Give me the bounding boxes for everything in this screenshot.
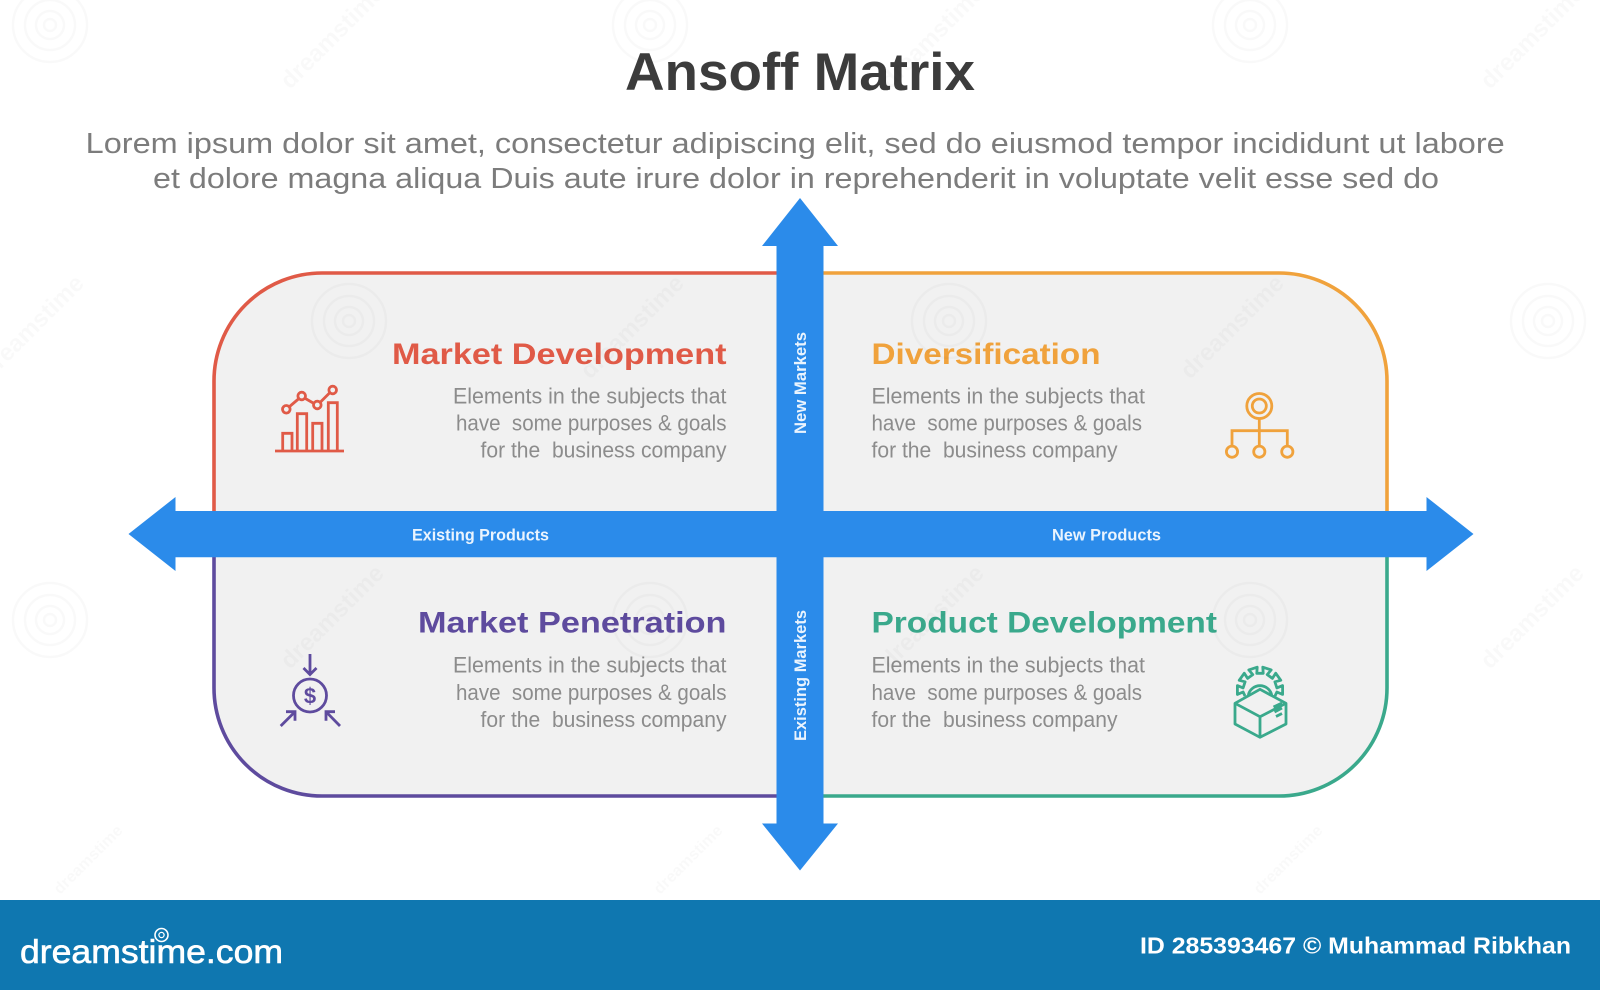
icon: bar chart: [275, 386, 344, 451]
watermark: dreamstime marks: dreamstime: [1475, 560, 1590, 674]
watermark: dreamstime marks: dreamstime: [1175, 270, 1290, 384]
icon: dollar with arrows: $: [304, 684, 316, 708]
heading: diversification: Diversification: [872, 338, 1100, 371]
text block: diversification: have some purposes & goals: [872, 410, 1142, 436]
text block: product development: have some purposes & goals: [872, 680, 1142, 705]
title: Ansoff Matrix: [625, 43, 976, 102]
text block: diversification: [872, 384, 1145, 462]
text block: market penetration: [453, 652, 726, 732]
text block: market penetration: have some purposes & goals: [456, 680, 726, 705]
intro text: [86, 128, 1505, 195]
icon: hierarchy: [1226, 394, 1293, 457]
text block: diversification: Elements in the subjects that: [872, 384, 1145, 408]
intro text: et dolore magna aliqua Duis aute irure dolor in reprehenderit in voluptate velit esse sed do: [153, 163, 1439, 195]
footer band: [0, 900, 1600, 990]
text block: market development: Elements in the subjects that: [453, 384, 726, 408]
logo: dreamstime: dreamstime.com: [20, 933, 283, 970]
watermark: dreamstime marks: dreamstime: [651, 822, 726, 898]
panel: diversification: [800, 273, 1387, 534]
text block: market development: have some purposes & goals: [456, 410, 726, 436]
watermark: dreamstime marks: dreamstime: [1251, 822, 1326, 898]
panel: product development: [800, 534, 1387, 796]
axis label: new products: New Products: [1052, 526, 1161, 544]
panel: market development: [214, 273, 800, 534]
text block: product development: [872, 652, 1145, 732]
arrow: horizontal axis: [128, 497, 1474, 571]
icon: box and gear: [1235, 667, 1286, 737]
axis label: existing markets: Existing Markets: [792, 610, 810, 741]
text block: product development: Elements in the subjects that: [872, 652, 1145, 678]
watermark: dreamstime marks: dreamstime: [575, 270, 690, 384]
watermark: dreamstime marks: dreamstime: [275, 560, 390, 674]
heading: market penetration: Market Penetration: [418, 606, 726, 640]
text block: market penetration: for the business company: [480, 707, 726, 732]
arrow: vertical axis: [762, 198, 838, 870]
panel: market penetration: [214, 534, 800, 796]
watermark: dreamstime marks: dreamstime: [51, 822, 126, 898]
watermark: dreamstime marks: dreamstime: [875, 560, 990, 674]
text block: market development: [453, 384, 726, 462]
heading: market development: Market Development: [392, 338, 726, 371]
image credit: ID 285393467 © Muhammad Ribkhan: [1140, 932, 1571, 958]
axis label: new markets: New Markets: [792, 332, 810, 434]
text block: market penetration: Elements in the subjects that: [453, 652, 726, 678]
text block: diversification: for the business company: [872, 438, 1118, 462]
intro text: Lorem ipsum dolor sit amet, consectetur adipiscing elit, sed do eiusmod tempor incididunt ut labore: [86, 128, 1505, 160]
icon: dollar with arrows: [281, 654, 340, 726]
axis label: existing products: Existing Products: [412, 526, 549, 544]
text block: market development: for the business company: [480, 438, 726, 462]
text block: product development: for the business company: [872, 707, 1118, 732]
heading: product development: Product Development: [872, 606, 1217, 640]
